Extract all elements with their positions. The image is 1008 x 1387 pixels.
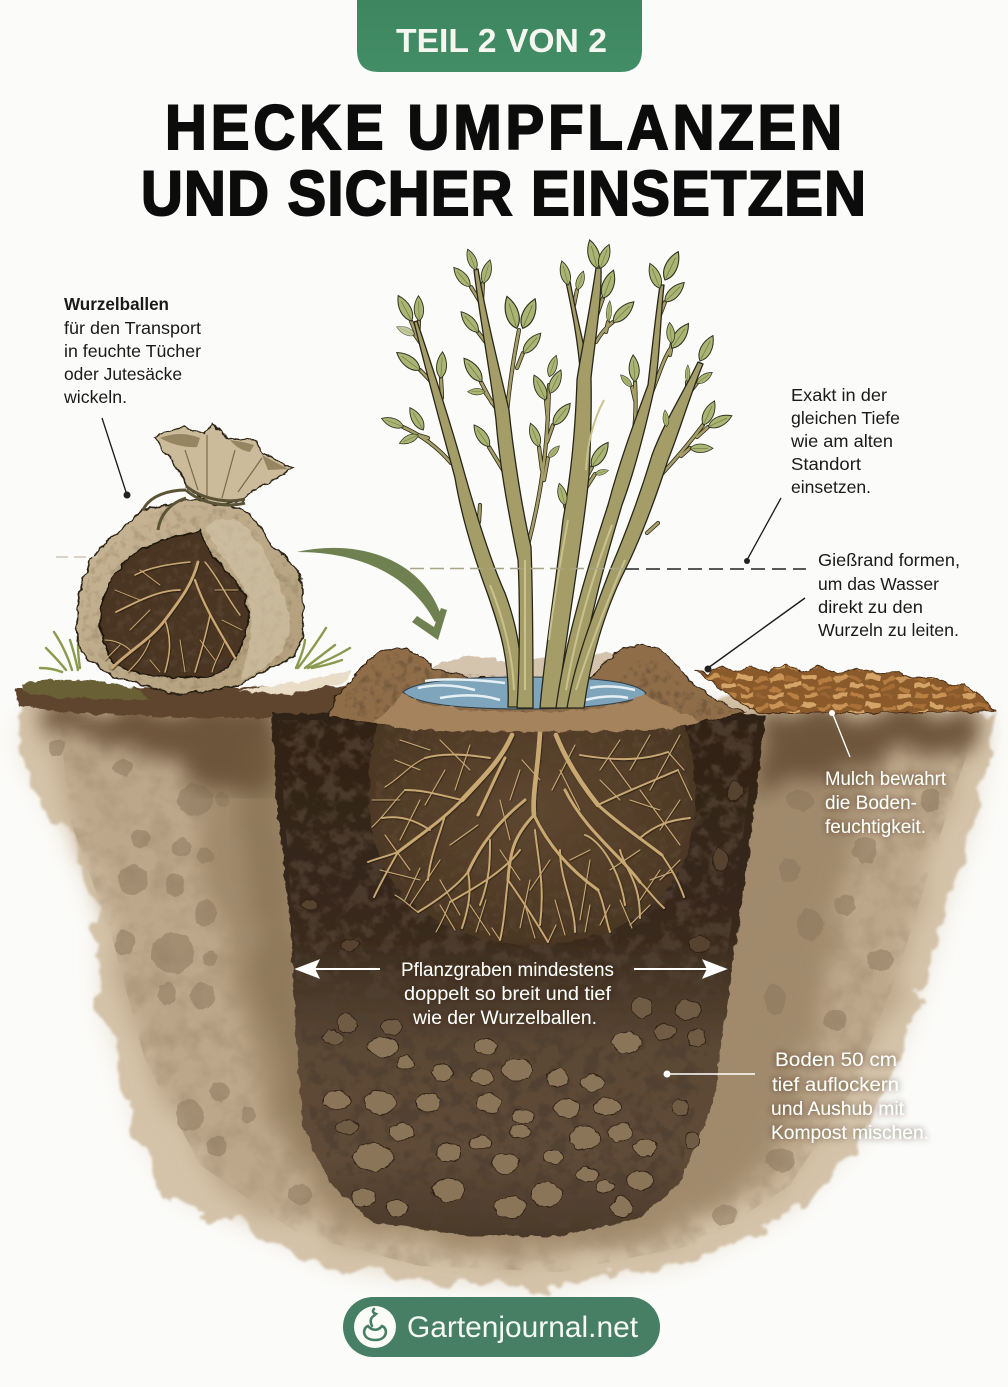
- roots: [368, 732, 692, 942]
- sack neck flaps: [155, 423, 292, 505]
- title: [141, 92, 866, 229]
- soil blotches: [49, 738, 939, 1225]
- title: UND SICHER EINSETZEN: [141, 158, 866, 229]
- callout: Tiefe: gleichen Tiefe: [791, 408, 900, 428]
- stem highlights: [490, 400, 625, 690]
- header tab: [357, 0, 642, 72]
- soft outer wash: [26, 720, 985, 1282]
- soil cross-section: [14, 670, 996, 1288]
- callout: Mulch: [825, 710, 947, 838]
- surface band: [14, 686, 420, 722]
- callout: Gießrand: um das Wasser: [818, 574, 939, 594]
- callout: Mulch: die Boden-: [825, 793, 917, 814]
- callout text: wickeln.: [63, 387, 127, 407]
- side twigs fill: [403, 283, 708, 552]
- callout: Tiefe: wie am alten: [790, 431, 893, 451]
- haze behind basin: [425, 653, 630, 682]
- flap inner shading: [160, 434, 288, 470]
- callout: Mulch: Mulch bewahrt: [825, 769, 947, 790]
- callout: Pflanzgraben with width arrows: wie der Wurzelballen.: [412, 1008, 597, 1029]
- callout: Gießrand: Wurzeln zu leiten.: [818, 620, 959, 640]
- side twigs outline: [403, 283, 708, 552]
- hedge plant: [380, 238, 734, 708]
- sack roots: [105, 562, 242, 672]
- callout: Mulch: feuchtigkeit.: [825, 817, 926, 838]
- sack fold: [207, 518, 290, 680]
- inner soil tone: [190, 725, 880, 1248]
- earth mounds: [330, 645, 745, 730]
- rim front: [372, 694, 700, 732]
- planting trench: [272, 712, 766, 1236]
- trench clods: [302, 779, 743, 1218]
- surface grass mat: [22, 679, 150, 700]
- burlap sack with root ball: [77, 423, 304, 695]
- green transfer arrow: [297, 548, 447, 640]
- callout: Boden: Boden 50 cm: [775, 1050, 897, 1071]
- water highlights: [418, 679, 635, 700]
- callout text: [63, 294, 201, 407]
- header tab: TEIL 2 VON 2: [396, 22, 607, 59]
- callout: Gießrand: direkt zu den: [818, 597, 923, 617]
- stems: [414, 268, 703, 708]
- mid soil tone: [50, 705, 975, 1262]
- callout: Pflanzgraben with width arrows: [297, 960, 725, 1029]
- callout: Tiefe: einsetzen.: [791, 477, 871, 497]
- callout text: oder Jutesäcke: [64, 364, 182, 384]
- neck fold lines: [185, 435, 262, 500]
- earth grain: [345, 653, 735, 726]
- pale strip by sack: [238, 670, 352, 695]
- right arrow: [634, 961, 725, 977]
- title: HECKE UMPFLANZEN: [165, 92, 842, 163]
- callout text: Wurzelballen: [64, 294, 169, 314]
- footer brand pill: Gartenjournal.net: [407, 1311, 639, 1344]
- dark topsoil fade left: [30, 708, 275, 790]
- pale soil base: [16, 695, 996, 1288]
- callout: Boden: und Aushub mit: [771, 1099, 905, 1120]
- dark topsoil fade right: [755, 714, 985, 800]
- left wall shadow: [240, 730, 345, 1200]
- planting depth dashed line: [56, 557, 806, 569]
- leaves: [380, 238, 734, 506]
- callout: Pflanzgraben with width arrows: Pflanzgraben mindestens: [401, 960, 614, 981]
- sack soil grain: [106, 536, 242, 672]
- callout: Tiefe: Standort: [791, 454, 861, 474]
- sack opening: [100, 530, 248, 677]
- left arrow: [297, 961, 380, 977]
- callout: Wurzelballen: [63, 294, 201, 498]
- footer brand pill: [343, 1297, 660, 1357]
- twine: [143, 486, 245, 530]
- sack body: [77, 500, 304, 695]
- root ball: [368, 720, 696, 945]
- leader line: [102, 418, 127, 495]
- callout: Boden: tief auflockern: [772, 1075, 899, 1096]
- ball body: [369, 720, 696, 945]
- mulch layer: [694, 664, 996, 713]
- logo icon: [354, 1306, 396, 1348]
- water: [403, 677, 646, 709]
- callout: Boden: [664, 1050, 929, 1144]
- ball grain: [376, 724, 689, 938]
- trench mottling: [278, 720, 758, 1228]
- callout: Tiefe: [744, 385, 900, 564]
- callout text: für den Transport: [64, 318, 201, 338]
- grass tufts: [40, 628, 350, 672]
- callout: Boden: Kompost mischen.: [771, 1123, 929, 1144]
- callout: Tiefe: Exakt in der: [791, 385, 887, 405]
- sack grain: [81, 505, 300, 691]
- callout: Gießrand: Gießrand formen,: [818, 550, 960, 570]
- callout text: in feuchte Tücher: [64, 341, 201, 361]
- watering rim and water basin: [330, 645, 745, 732]
- callout: Pflanzgraben with width arrows: doppelt so breit und tief: [404, 984, 612, 1005]
- callout: Gießrand: [704, 550, 960, 672]
- soil mottling: [60, 725, 975, 1272]
